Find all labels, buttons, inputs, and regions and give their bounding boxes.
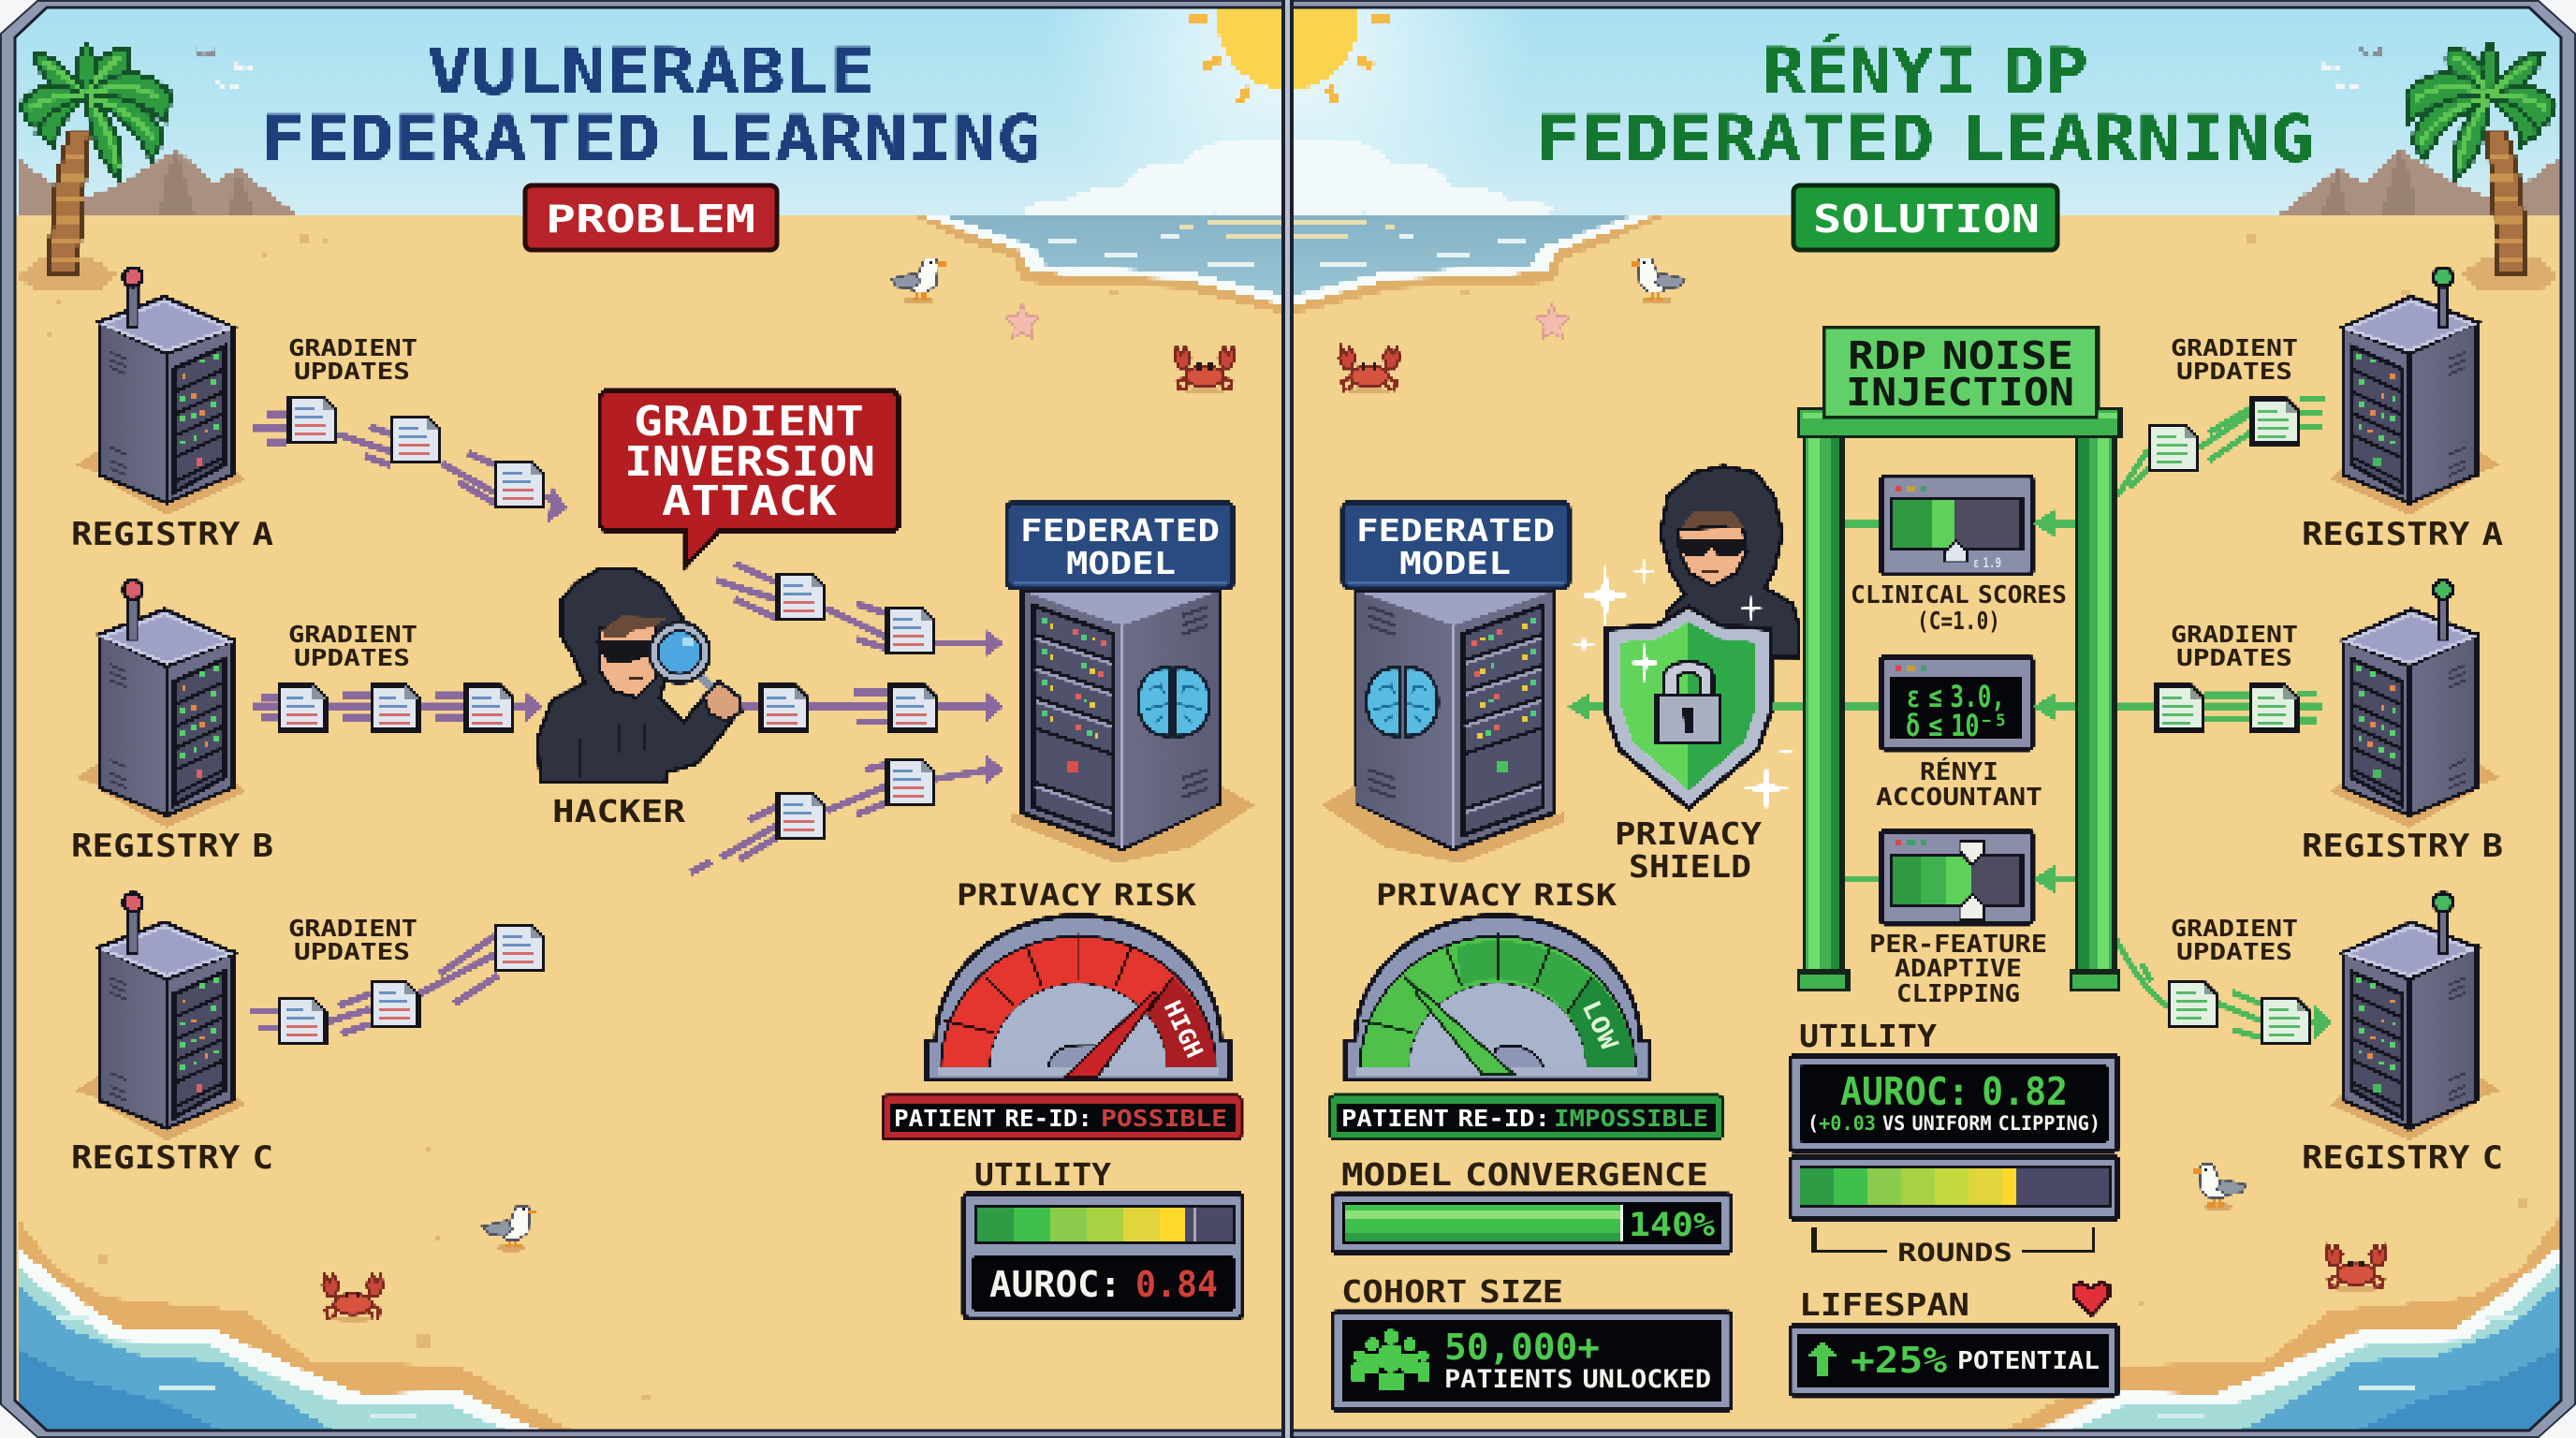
gradient updates labels right: GRADIENT xyxy=(2171,334,2298,361)
auroc 0.84: 0.84 xyxy=(1135,1264,1218,1305)
sparkles xyxy=(1573,558,1793,815)
federated model label right xyxy=(1356,512,1555,581)
icon: patient group xyxy=(1352,1329,1430,1391)
patient re-id impossible text: PATIENT RE-ID: xyxy=(1341,1105,1550,1132)
privacy shield label: SHIELD xyxy=(1629,848,1751,885)
sun xyxy=(1187,0,1389,116)
cohort value: 50,000+ xyxy=(1444,1327,1600,1368)
arrowhead attack middle xyxy=(985,691,1003,723)
cohort size label: COHORT SIZE xyxy=(1341,1273,1563,1310)
lifespan label: LIFESPAN xyxy=(1799,1286,1969,1323)
privacy shield label xyxy=(1615,815,1762,885)
per-feature adaptive clipping label: CLIPPING xyxy=(1896,980,2020,1008)
clinical scores label xyxy=(1851,581,2067,636)
clinical scores label: CLINICAL SCORES xyxy=(1851,581,2067,609)
utility readout problem xyxy=(964,1194,1242,1318)
starfish xyxy=(1005,304,1569,338)
small birds xyxy=(194,47,2382,91)
patient re-id impossible text xyxy=(1341,1105,1708,1132)
federated model server left xyxy=(1011,590,1254,863)
solution badge: SOLUTION xyxy=(1813,197,2040,242)
gradient flow arrows registry C xyxy=(251,936,498,1034)
green arrows from screens xyxy=(1568,509,2078,893)
cohort size panel xyxy=(1333,1313,1731,1410)
crabs xyxy=(323,347,2386,1322)
large pixel headings xyxy=(261,33,2314,177)
privacy gauge low risk xyxy=(1346,916,1649,1079)
privacy shield with lock xyxy=(1606,607,1771,808)
rdp noise injection text xyxy=(1846,333,2074,415)
privacy gauge high risk xyxy=(927,916,1230,1079)
federated model server right xyxy=(1322,590,1565,863)
arrowhead right bottom xyxy=(2314,1005,2333,1039)
registry labels left: REGISTRY A xyxy=(71,516,273,553)
clinical scores label: (C=1.0) xyxy=(1917,608,2000,636)
solution badge xyxy=(1793,185,2057,250)
patient re-id possible text: PATIENT RE-ID: xyxy=(894,1105,1092,1132)
green flow right side top xyxy=(2117,399,2325,496)
gradient updates labels left: GRADIENT xyxy=(288,621,417,648)
cohort value xyxy=(1444,1327,1711,1394)
icon: heart xyxy=(2073,1283,2109,1315)
screen renyi accountant xyxy=(1881,657,2032,749)
attack bubble text: GRADIENT xyxy=(634,398,864,446)
registry labels left xyxy=(71,516,273,1177)
auroc 0.82: AUROC: 0.82 xyxy=(1840,1069,2068,1114)
lifespan value xyxy=(1851,1340,2100,1381)
registry labels right: REGISTRY A xyxy=(2302,516,2503,553)
arrowhead registry B xyxy=(524,691,543,723)
registry labels right: REGISTRY C xyxy=(2302,1139,2503,1177)
gradient flow arrows registry A xyxy=(253,415,562,506)
clipping screen clinical scores xyxy=(1881,477,2032,574)
registry servers right xyxy=(2331,268,2500,1140)
gradient updates labels right: GRADIENT xyxy=(2171,621,2298,648)
renyi accountant label: ACCOUNTANT xyxy=(1876,784,2042,812)
lifespan value: POTENTIAL xyxy=(1957,1347,2100,1375)
problem badge: PROBLEM xyxy=(546,197,755,242)
patient re-id possible pill xyxy=(883,1095,1241,1139)
seagulls xyxy=(483,258,2247,1252)
icon: up arrow xyxy=(1807,1341,1838,1377)
model convergence bar xyxy=(1333,1195,1731,1253)
hacker behind shield xyxy=(1661,466,1799,657)
patient re-id possible text xyxy=(894,1105,1227,1132)
high label: HIGH xyxy=(1159,996,1208,1063)
gradient updates labels left: UPDATES xyxy=(294,358,410,385)
privacy shield label: PRIVACY xyxy=(1615,815,1762,852)
per-feature adaptive clipping label: ADAPTIVE xyxy=(1895,955,2022,983)
sun glow xyxy=(1030,0,1546,217)
rdp noise injection arch xyxy=(1799,328,2120,990)
gradient documents left xyxy=(279,398,543,1044)
gradient documents after hacker xyxy=(761,575,937,839)
federated model label right: MODEL xyxy=(1399,545,1511,581)
attack flow bottom xyxy=(691,765,990,873)
title left: VULNERABLE xyxy=(427,35,874,110)
gradient updates labels left: GRADIENT xyxy=(288,915,417,942)
cohort value: PATIENTS UNLOCKED xyxy=(1444,1365,1711,1394)
patient re-id impossible pill xyxy=(1330,1095,1722,1139)
federated model sign right xyxy=(1343,503,1569,588)
per-feature adaptive clipping label: PER-FEATURE xyxy=(1869,931,2047,959)
illustrations layer xyxy=(76,258,2500,1410)
all other text xyxy=(71,185,2503,1394)
arrowhead attack top xyxy=(985,629,1003,657)
title right: RÉNYI DP xyxy=(1763,33,2088,110)
gradient updates labels left: GRADIENT xyxy=(288,334,417,361)
registry labels left: REGISTRY C xyxy=(71,1139,273,1177)
renyi accountant label: RÉNYI xyxy=(1920,756,1998,786)
federated model label left: MODEL xyxy=(1066,545,1176,581)
green flow right side bottom xyxy=(2115,938,2321,1037)
rounds label: ROUNDS xyxy=(1897,1239,2012,1268)
lifespan value: +25% xyxy=(1851,1340,1947,1381)
auroc 0.82 xyxy=(1808,1069,2100,1135)
140 percent: 140% xyxy=(1629,1207,1715,1244)
privacy risk label right: PRIVACY RISK xyxy=(1376,877,1617,913)
auroc 0.84 xyxy=(989,1264,1218,1305)
utility auroc panel solution xyxy=(1791,1056,2117,1151)
federated model label left xyxy=(1020,512,1220,581)
auroc 0.84: AUROC: xyxy=(989,1264,1121,1305)
federated model label right: FEDERATED xyxy=(1356,512,1555,549)
rdp noise injection text: INJECTION xyxy=(1846,370,2074,415)
gradient updates labels left: UPDATES xyxy=(294,938,410,965)
gradient updates labels right: GRADIENT xyxy=(2171,915,2298,942)
attack bubble text: ATTACK xyxy=(662,477,838,525)
screen adaptive clipping xyxy=(1881,831,2032,923)
clouds xyxy=(1024,139,1552,222)
attack flow middle xyxy=(735,693,988,722)
title right xyxy=(1536,33,2314,177)
title right: FEDERATED LEARNING xyxy=(1536,102,2314,177)
epsilon delta bounds xyxy=(1906,679,2008,743)
attack bubble text: INVERSION xyxy=(624,438,875,486)
rounds bracket xyxy=(1814,1228,2094,1251)
title left: FEDERATED LEARNING xyxy=(261,102,1041,177)
utility label right: UTILITY xyxy=(1799,1018,1937,1054)
gradient updates labels left: UPDATES xyxy=(294,644,410,671)
utility rounds bar xyxy=(1791,1157,2117,1219)
federated model label left: FEDERATED xyxy=(1020,512,1220,549)
rdp noise injection text: RDP NOISE xyxy=(1848,333,2073,378)
epsilon delta bounds: ε ≤ 3.0, xyxy=(1907,679,2005,714)
gradient updates labels right xyxy=(2171,334,2298,965)
auroc 0.82: (+0.03 VS UNIFORM CLIPPING) xyxy=(1808,1112,2100,1135)
green documents right xyxy=(2150,399,2309,1044)
sky xyxy=(0,0,2576,217)
per-feature adaptive clipping label xyxy=(1869,931,2047,1008)
problem badge xyxy=(525,185,777,250)
arrowhead attack bottom xyxy=(985,754,1003,785)
gradient updates labels left xyxy=(288,334,417,965)
low label: LOW xyxy=(1576,996,1623,1054)
gradient updates labels right: UPDATES xyxy=(2176,938,2292,965)
attack bubble text xyxy=(624,398,875,525)
hacker with magnifying glass xyxy=(537,568,741,782)
patient re-id impossible text: IMPOSSIBLE xyxy=(1554,1105,1708,1132)
lifespan panel xyxy=(1791,1326,2117,1395)
federated model sign left xyxy=(1007,503,1233,588)
arrowhead registry A xyxy=(548,487,567,522)
registry labels left: REGISTRY B xyxy=(71,828,273,865)
screen small value: ε 1.9 xyxy=(1973,556,2001,571)
green flow right side middle xyxy=(2115,694,2321,721)
utility label left: UTILITY xyxy=(974,1156,1111,1193)
shoreline top left and right xyxy=(906,213,1670,315)
attack flow top xyxy=(716,564,990,648)
hacker label: HACKER xyxy=(552,793,685,829)
privacy risk label left: PRIVACY RISK xyxy=(957,877,1197,913)
gradient inversion attack speech bubble xyxy=(600,391,899,565)
bay bottom corners xyxy=(17,1217,2559,1432)
registry servers left xyxy=(76,268,245,1140)
gradient updates labels right: UPDATES xyxy=(2176,358,2292,385)
patient re-id possible text: POSSIBLE xyxy=(1101,1105,1227,1132)
mountains xyxy=(17,149,2559,213)
registry labels right xyxy=(2302,516,2503,1177)
registry labels right: REGISTRY B xyxy=(2302,828,2503,865)
epsilon delta bounds: δ ≤ 10⁻⁵ xyxy=(1906,708,2008,743)
title left xyxy=(261,35,1041,177)
gradient updates labels right: UPDATES xyxy=(2176,644,2292,671)
model convergence label: MODEL CONVERGENCE xyxy=(1341,1156,1708,1193)
renyi accountant label xyxy=(1876,756,2042,812)
palm trees xyxy=(17,43,2559,292)
gradient flow arrows registry B xyxy=(253,696,529,718)
